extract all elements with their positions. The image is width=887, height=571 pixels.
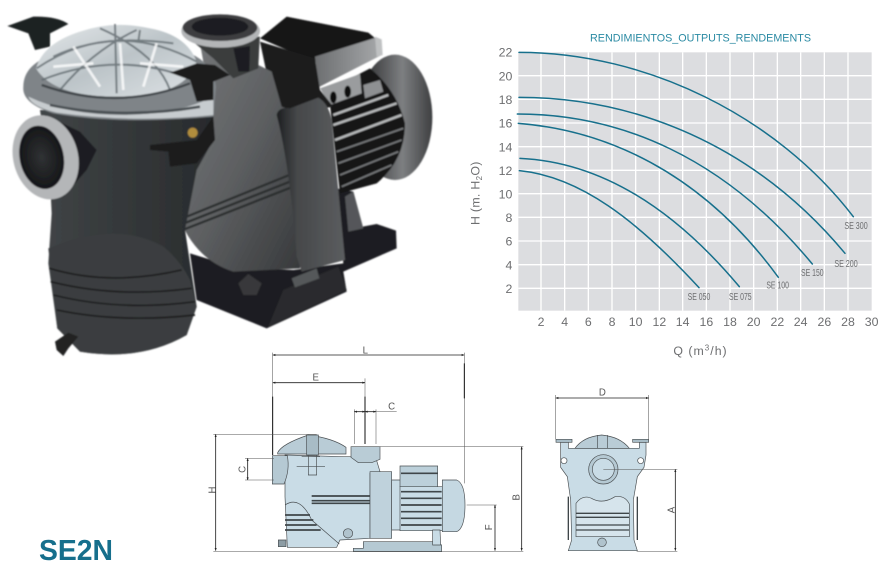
lid handle left bbox=[7, 17, 68, 50]
x axis numbers: 6 bbox=[585, 315, 592, 329]
curve SE 075 bbox=[520, 158, 739, 287]
dimension arrows bbox=[556, 398, 675, 551]
y axis title: 2 bbox=[475, 175, 484, 180]
dimension letters: E bbox=[312, 373, 319, 384]
product name: SE2N bbox=[39, 535, 113, 567]
x axis numbers: 20 bbox=[747, 315, 761, 329]
dimension letters: H bbox=[208, 486, 219, 493]
dimension letters: C bbox=[388, 402, 395, 413]
curve labels: SE 075 bbox=[729, 292, 752, 303]
dimension letters: B bbox=[511, 494, 522, 501]
x axis numbers: 8 bbox=[609, 315, 616, 329]
outlet neck bbox=[181, 14, 260, 78]
title: performance chart: RENDIMIENTOS_OUTPUTS_RENDEMENTS bbox=[590, 32, 811, 44]
x axis numbers: 16 bbox=[699, 315, 713, 329]
motor fan cover bbox=[358, 55, 432, 180]
curve SE 050 bbox=[519, 171, 699, 288]
y axis numbers: 14 bbox=[499, 140, 512, 154]
pump curves bbox=[517, 52, 853, 288]
y axis numbers: 20 bbox=[499, 69, 512, 83]
y axis numbers: 12 bbox=[499, 164, 512, 178]
x axis numbers bbox=[538, 315, 879, 329]
y axis numbers: 22 bbox=[499, 46, 512, 60]
dimension letters: C bbox=[238, 466, 249, 473]
dimension letters: L bbox=[363, 346, 369, 357]
volute ribs bbox=[178, 173, 300, 232]
x axis numbers: 22 bbox=[770, 315, 784, 329]
pump side outline bbox=[272, 435, 465, 552]
product photo: pool pump bbox=[3, 14, 432, 356]
y axis numbers: 10 bbox=[499, 187, 512, 201]
terminal box bbox=[260, 17, 383, 117]
dimension lines bbox=[213, 353, 523, 551]
x axis title: Q (m bbox=[673, 344, 704, 358]
y axis numbers: 4 bbox=[505, 258, 512, 272]
x axis numbers: 10 bbox=[629, 315, 643, 329]
dimension letters: F bbox=[484, 524, 495, 530]
front view technical drawing bbox=[556, 388, 678, 552]
x axis numbers: 14 bbox=[676, 315, 690, 329]
transparent lid bbox=[23, 24, 216, 120]
y axis numbers bbox=[499, 46, 512, 296]
x axis numbers: 26 bbox=[817, 315, 831, 329]
curve labels bbox=[688, 221, 868, 303]
y axis numbers: 6 bbox=[505, 235, 512, 249]
x axis numbers: 4 bbox=[561, 315, 568, 329]
motor bracket flange bbox=[277, 98, 345, 272]
front view stripes bbox=[568, 497, 637, 540]
dimension letters bbox=[208, 346, 522, 530]
strainer pot bbox=[40, 110, 215, 354]
dimension letters: A bbox=[667, 506, 678, 513]
x axis title: 3 bbox=[705, 343, 710, 352]
y axis numbers: 2 bbox=[505, 282, 512, 296]
performance curves chart bbox=[468, 46, 879, 358]
side view technical drawing bbox=[208, 346, 523, 552]
pump volute body bbox=[180, 37, 300, 272]
y axis title: O) bbox=[468, 162, 482, 176]
x axis numbers: 28 bbox=[841, 315, 855, 329]
curve SE 200 bbox=[519, 97, 845, 253]
y axis numbers: 18 bbox=[499, 93, 512, 107]
x axis numbers: 24 bbox=[794, 315, 808, 329]
dimension lines bbox=[556, 395, 677, 552]
curve SE 300 bbox=[519, 52, 853, 217]
x axis numbers: 18 bbox=[723, 315, 737, 329]
drain plug bbox=[55, 333, 78, 356]
lid handle right bbox=[170, 63, 230, 102]
curve SE 150 bbox=[517, 114, 812, 264]
curve labels: SE 050 bbox=[688, 292, 710, 303]
pump base plate bbox=[190, 188, 397, 328]
x axis numbers: 12 bbox=[652, 315, 666, 329]
dimension letters bbox=[599, 388, 678, 513]
body stripes bbox=[285, 473, 442, 530]
y axis title: H (m. H bbox=[468, 181, 482, 225]
dimension letters: D bbox=[599, 388, 606, 399]
inlet port ring bbox=[3, 108, 97, 207]
x axis numbers: 30 bbox=[865, 315, 879, 329]
motor cooling fins bbox=[320, 68, 405, 193]
curve labels: SE 200 bbox=[834, 259, 858, 270]
y axis numbers: 8 bbox=[505, 211, 512, 225]
chart grid bbox=[518, 52, 872, 311]
dimension arrows bbox=[216, 355, 522, 551]
curve labels: SE 300 bbox=[844, 221, 868, 232]
x axis numbers: 2 bbox=[538, 315, 545, 329]
x axis title: /h) bbox=[710, 344, 727, 358]
y axis numbers: 16 bbox=[499, 117, 512, 131]
pump front outline bbox=[556, 435, 649, 551]
curve labels: SE 100 bbox=[766, 281, 789, 292]
curve SE 100 bbox=[518, 123, 778, 277]
curve labels: SE 150 bbox=[801, 268, 824, 279]
